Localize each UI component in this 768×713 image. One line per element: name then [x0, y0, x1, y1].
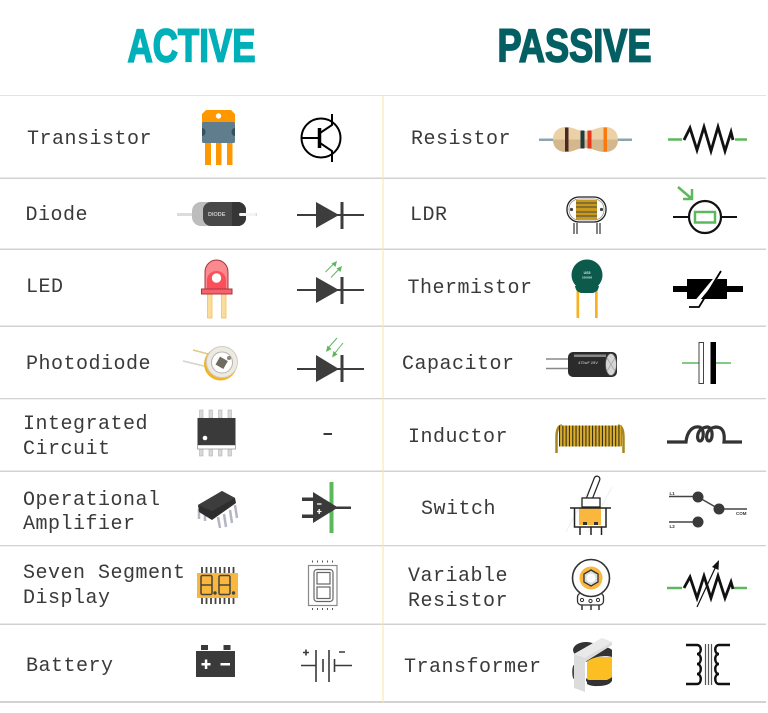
icon: LDR component [567, 197, 606, 234]
icon: LED component [202, 260, 232, 318]
icon: thermistor component: US5 [584, 271, 590, 275]
label: Variable Resistor: Resistor [408, 590, 508, 613]
icon: transistor symbol [301, 114, 340, 162]
label: Seven Segment Display: Seven Segment [23, 562, 186, 585]
icon: op-amp chip [198, 491, 237, 528]
icon: thermistor symbol [673, 271, 743, 307]
icon: inductor component [556, 426, 624, 453]
icon: seven segment symbol [308, 562, 337, 609]
icon: switch symbol [669, 491, 747, 529]
icon: battery symbol [301, 650, 352, 682]
label: Transformer: Transformer [404, 656, 542, 679]
panel: passive components [402, 127, 747, 692]
label: Seven Segment Display: Display [23, 587, 111, 610]
label: LED: LED [26, 276, 64, 299]
icon: diode symbol [297, 202, 364, 229]
label: Integrated Circuit: Integrated [23, 413, 148, 436]
label: Diode: Diode [26, 204, 88, 227]
icon: capacitor symbol [682, 342, 731, 384]
icon: transformer symbol [686, 644, 730, 685]
icon: potentiometer component [572, 560, 610, 610]
heading: ACTIVE: ACTIVE [128, 20, 256, 72]
icon: diode component [177, 202, 257, 226]
icon: photodiode symbol [297, 338, 364, 382]
icon: photodiode component [183, 346, 238, 380]
icon: transformer component [572, 638, 612, 692]
icon: capacitor component [546, 352, 617, 377]
icon: battery component [196, 645, 235, 677]
label: Capacitor: Capacitor [402, 353, 515, 376]
label: Switch: Switch [421, 498, 496, 521]
label: Battery: Battery [26, 655, 114, 678]
panel: active components [23, 110, 364, 682]
icon: thermistor component [572, 260, 602, 318]
label: Transistor: Transistor [27, 128, 152, 151]
icon: switch symbol: L1 [670, 491, 675, 496]
icon: LDR symbol [673, 187, 737, 233]
icon: thermistor component: 100058 [582, 276, 592, 280]
icon: capacitor component: 470uF 25V [578, 360, 598, 365]
label: Photodiode: Photodiode [26, 353, 151, 376]
label: Integrated Circuit: Circuit [23, 438, 111, 461]
label: Inductor: Inductor [408, 426, 508, 449]
label: Operational Amplifier: Amplifier [23, 513, 136, 536]
label: Operational Amplifier: Operational [23, 489, 161, 512]
icon: op-amp symbol [302, 482, 351, 533]
icon: transistor component [202, 110, 235, 165]
icon: resistor component [539, 127, 632, 152]
label: Variable Resistor: Variable [408, 565, 508, 588]
icon: variable resistor symbol [667, 560, 747, 607]
icon: resistor symbol [668, 127, 747, 151]
heading: PASSIVE: PASSIVE [498, 20, 652, 72]
icon: LED symbol [297, 261, 364, 304]
icon: no symbol dash [324, 433, 332, 435]
icon: switch symbol: L2 [670, 524, 675, 529]
icon: integrated circuit chip [198, 410, 236, 456]
icon: inductor symbol [667, 427, 742, 442]
icon: seven segment chip [197, 567, 238, 604]
icon: diode component: DIODE [208, 212, 226, 218]
label: Thermistor: Thermistor [408, 277, 533, 300]
icon: toggle switch component [566, 479, 612, 535]
label: Resistor: Resistor [411, 128, 511, 151]
icon: switch symbol: COM [736, 511, 747, 516]
label: LDR: LDR [410, 204, 448, 227]
